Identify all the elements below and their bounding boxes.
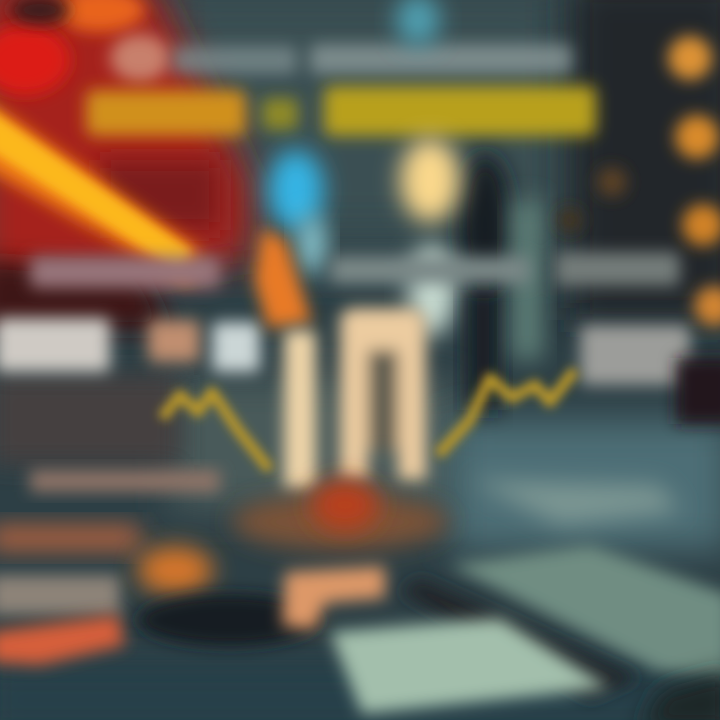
icon: cyan glow bbox=[268, 0, 440, 275]
chart: yellow zigzag lines bbox=[162, 370, 575, 470]
text block: white left blocks bbox=[0, 318, 260, 372]
icon: brown base ellipse bbox=[232, 479, 448, 550]
icon: orange flame bbox=[254, 228, 312, 328]
panel: dark disc bbox=[138, 594, 322, 646]
icon: orange shape bottom centre bbox=[282, 566, 385, 630]
heading: yellow title bar bbox=[86, 86, 596, 136]
icon: cream flame and dark shape bbox=[400, 138, 542, 410]
dark corner bbox=[640, 670, 720, 720]
text block: right block bbox=[580, 325, 720, 424]
panel: red explosion top left bbox=[0, 0, 250, 330]
panel: lower left stripes bbox=[0, 470, 220, 665]
icon: orange glowing dots bbox=[558, 36, 720, 326]
yellow diagonal streak bbox=[0, 95, 200, 285]
panel: lower right books bbox=[400, 480, 720, 700]
heading: grey title bar bbox=[172, 44, 572, 74]
chart: cream pillars bbox=[284, 308, 426, 490]
panel: bottom sheet bbox=[330, 618, 610, 714]
text block: grey band bbox=[30, 252, 680, 288]
